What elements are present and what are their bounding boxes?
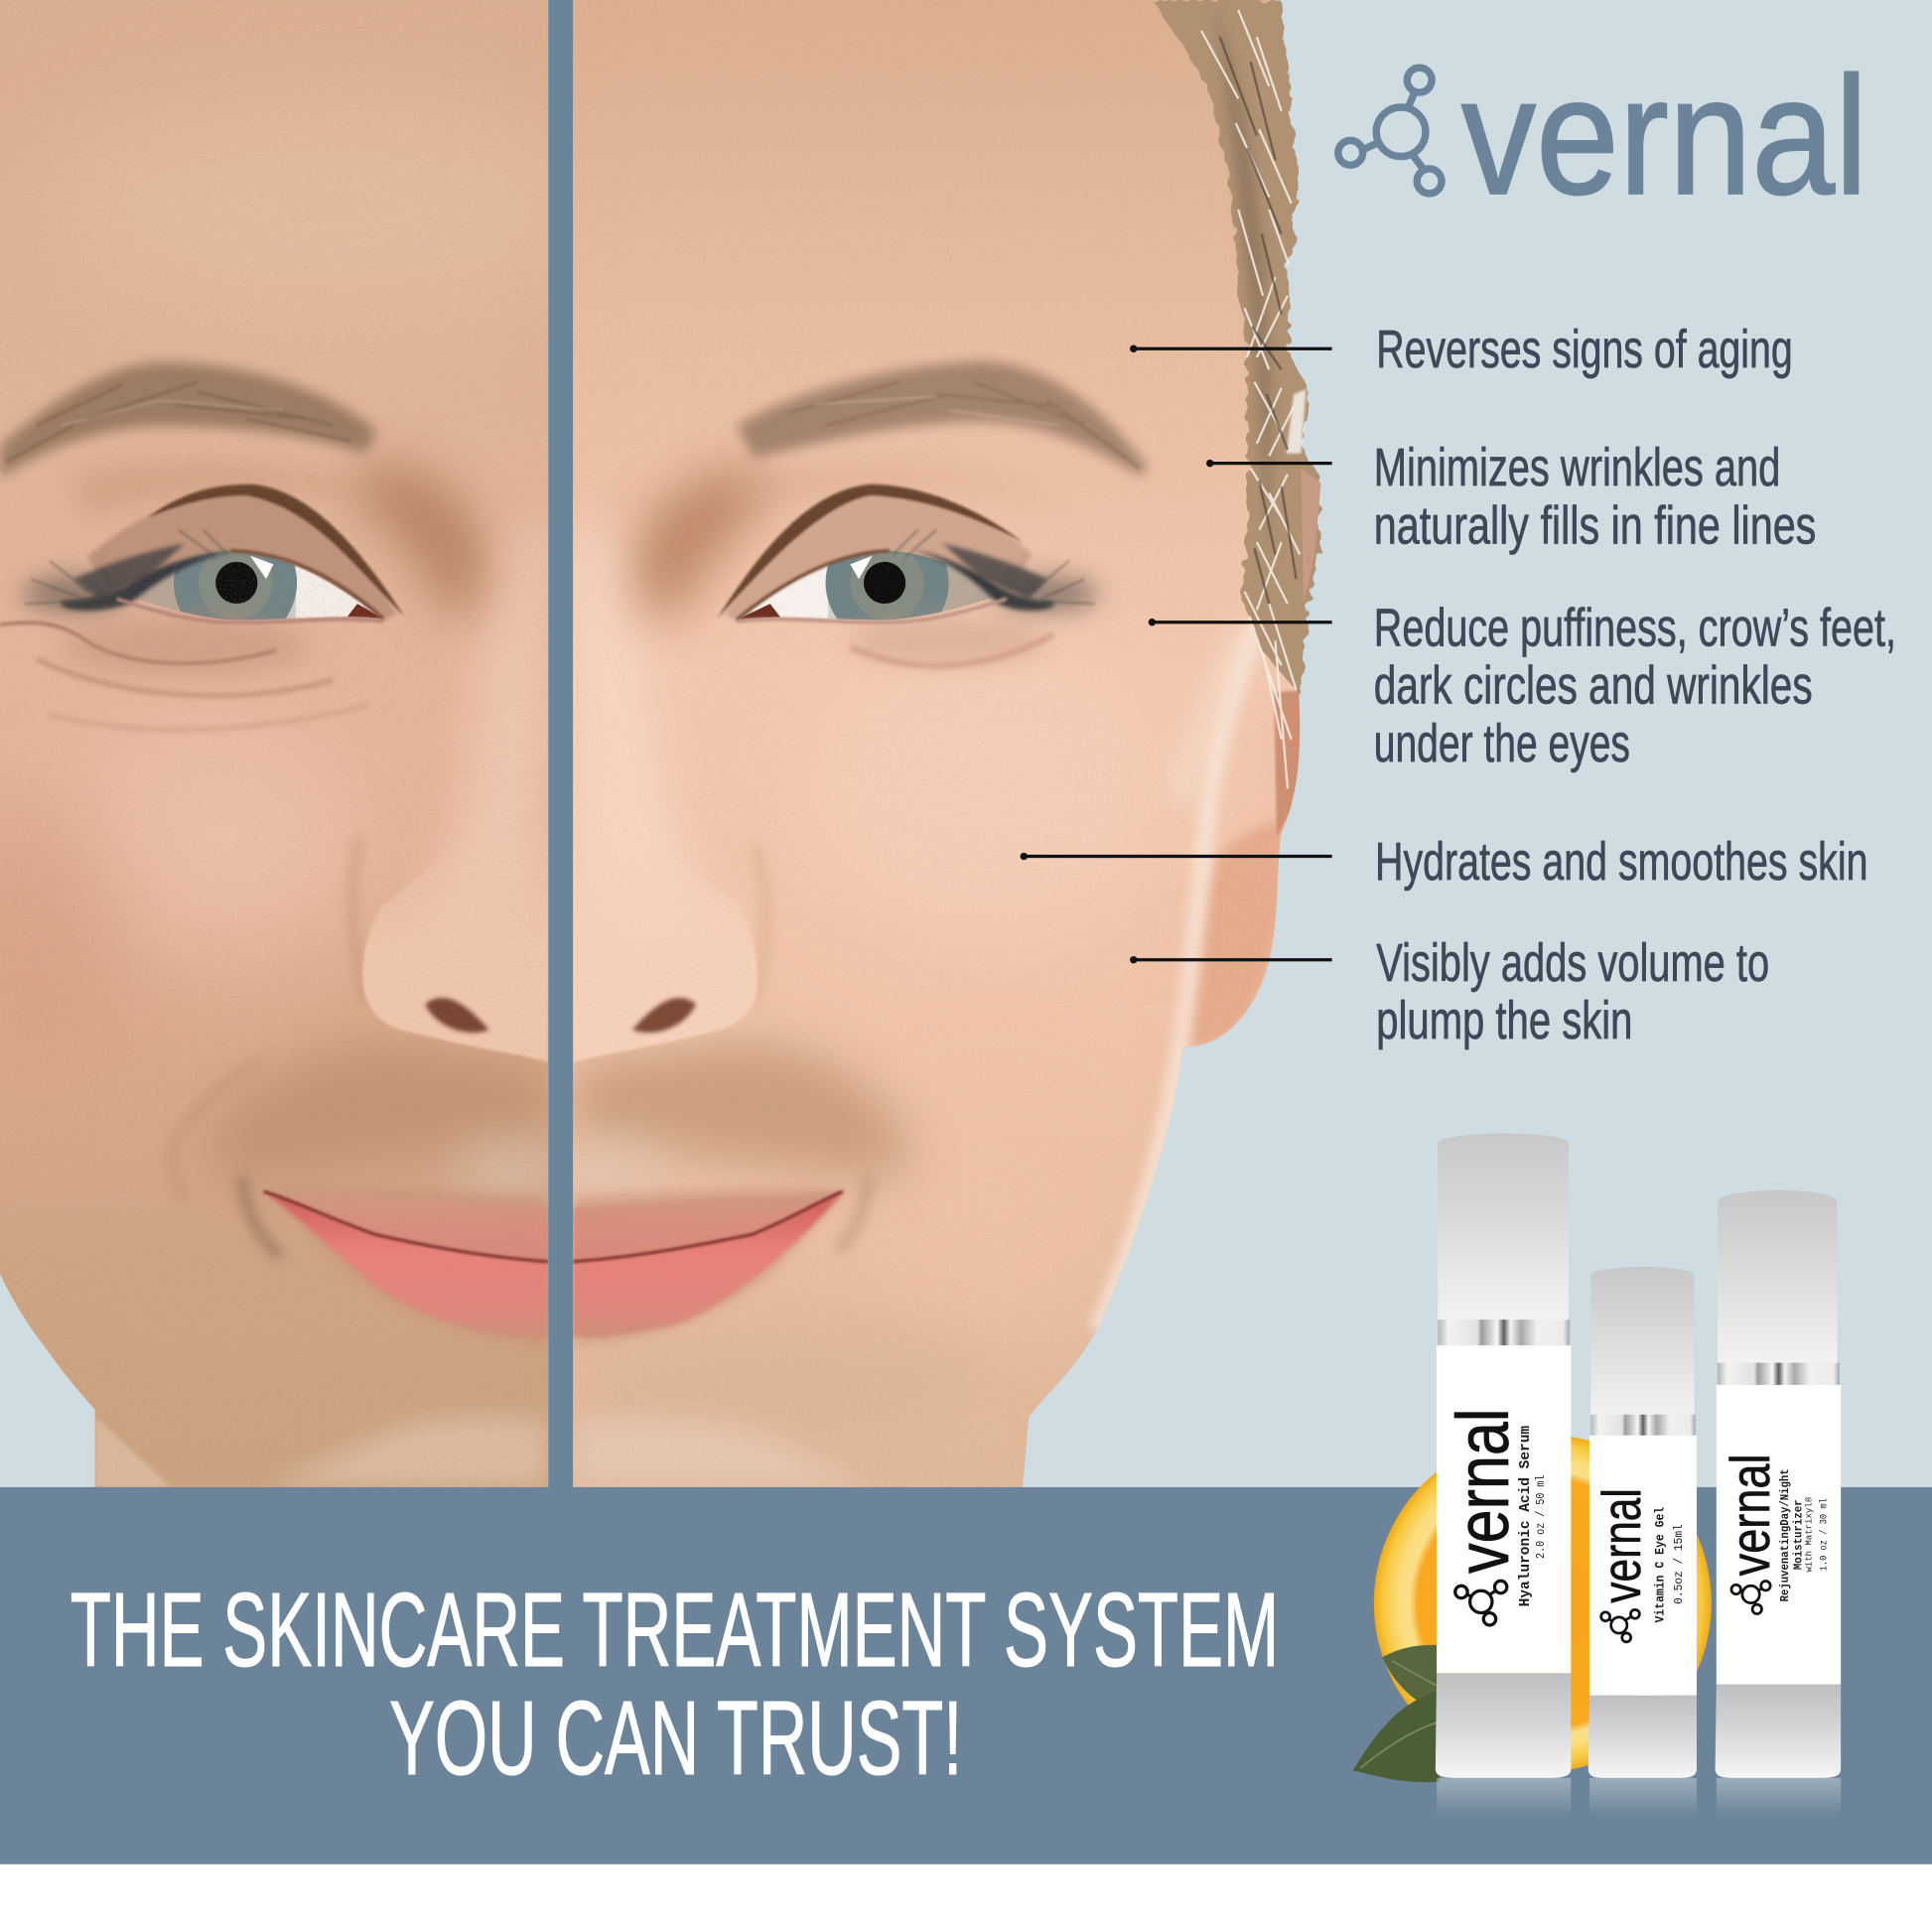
shading around mouth <box>204 1041 548 1182</box>
bottle: rejuvenating moisturizer: vernal <box>1719 1453 1781 1576</box>
benefit: reduce puffiness: under the eyes <box>1374 715 1630 773</box>
right skin and ear <box>554 0 1324 1487</box>
nose tip <box>361 882 548 1062</box>
blue vertical divider <box>548 0 573 1488</box>
nostril <box>425 998 489 1033</box>
under-eye crease <box>850 634 1053 665</box>
eyebrow <box>0 362 377 479</box>
hair at temple <box>1152 0 1322 788</box>
lips <box>573 1189 843 1343</box>
mouth corner crease <box>838 1176 869 1251</box>
philtrum highlight <box>554 1144 665 1197</box>
right half of face: after treatment <box>554 0 1324 1487</box>
left half of face: before treatment <box>0 0 548 1487</box>
face photo illustration <box>0 0 1324 1487</box>
skin grain <box>573 0 1324 1487</box>
lips <box>264 1189 548 1343</box>
eyebrow <box>737 361 1149 476</box>
bottle: rejuvenating moisturizer: RejuvenatingDay/Night <box>1778 1468 1792 1601</box>
headline <box>70 1573 1279 1797</box>
benefit list <box>1374 321 1896 1050</box>
benefit: reduce puffiness <box>1374 599 1896 773</box>
benefit: minimizes wrinkles: Minimizes wrinkles and <box>1374 439 1780 497</box>
eye area <box>22 484 407 644</box>
under-eye wrinkles <box>0 622 276 663</box>
eye socket shadow <box>634 466 770 623</box>
headline: YOU CAN TRUST! <box>389 1681 962 1797</box>
reflection under products <box>1437 1778 1841 1818</box>
benefit: minimizes wrinkles: naturally fills in fine lines <box>1374 496 1816 555</box>
benefit: reverses signs of aging: Reverses signs of aging <box>1376 321 1793 379</box>
skin grain <box>0 0 548 1487</box>
neck below chin line <box>265 1418 548 1487</box>
light blue panel <box>0 0 1932 1488</box>
bottle: rejuvenating moisturizer: Moisturizer <box>1791 1499 1805 1570</box>
icon: molecule <box>1338 68 1442 194</box>
bottle: vitamin c eye gel: vernal <box>1591 1488 1652 1603</box>
eye area <box>717 484 1099 644</box>
bottle: rejuvenating moisturizer <box>1716 1190 1841 1778</box>
benefit: adds volume: Visibly adds volume to <box>1376 934 1769 993</box>
lower ear <box>1180 819 1284 1047</box>
icon: orange slice <box>1374 1435 1712 1772</box>
benefit: minimizes wrinkles <box>1374 439 1816 555</box>
bottle: vitamin c eye gel: 0.5oz / 15ml <box>1672 1524 1686 1604</box>
bottom blue band <box>0 1487 1932 1864</box>
icon: leaves <box>1353 1645 1440 1782</box>
nose bridge highlight <box>573 530 722 1011</box>
headline: THE SKINCARE TREATMENT SYSTEM <box>70 1573 1279 1689</box>
product group <box>1353 1134 1841 1818</box>
bottle: hyaluronic acid serum: Hyaluronic Acid Serum <box>1518 1426 1534 1606</box>
bottle: hyaluronic acid serum <box>1436 1134 1571 1778</box>
upper ear <box>1274 690 1304 838</box>
callout lines with dots <box>1021 345 1332 964</box>
shading around mouth <box>573 1041 908 1176</box>
nose bridge highlight <box>427 528 548 908</box>
benefit: adds volume: plump the skin <box>1376 992 1632 1050</box>
mouth corner crease <box>241 1176 281 1257</box>
benefit: adds volume <box>1376 934 1769 1050</box>
bottle: hyaluronic acid serum: vernal <box>1442 1409 1524 1574</box>
eye socket shadow <box>351 462 487 622</box>
bottle: rejuvenating moisturizer: with Matrixyl® <box>1803 1496 1814 1573</box>
philtrum highlight <box>456 1144 567 1197</box>
vernal logo <box>1338 42 1867 229</box>
logo wordmark: vernal <box>1461 42 1867 229</box>
nostril <box>632 998 696 1033</box>
bottle: vitamin c eye gel: Vitamin C Eye Gel <box>1652 1507 1667 1622</box>
bottle: rejuvenating moisturizer: 1.0 oz / 30 ml <box>1818 1498 1830 1571</box>
bright rim of skin <box>1097 622 1257 1330</box>
bottle: vitamin c eye gel <box>1588 1267 1697 1778</box>
bottle: hyaluronic acid serum: 2.0 oz / 50 ml <box>1534 1475 1548 1559</box>
nose tip <box>573 740 758 1062</box>
